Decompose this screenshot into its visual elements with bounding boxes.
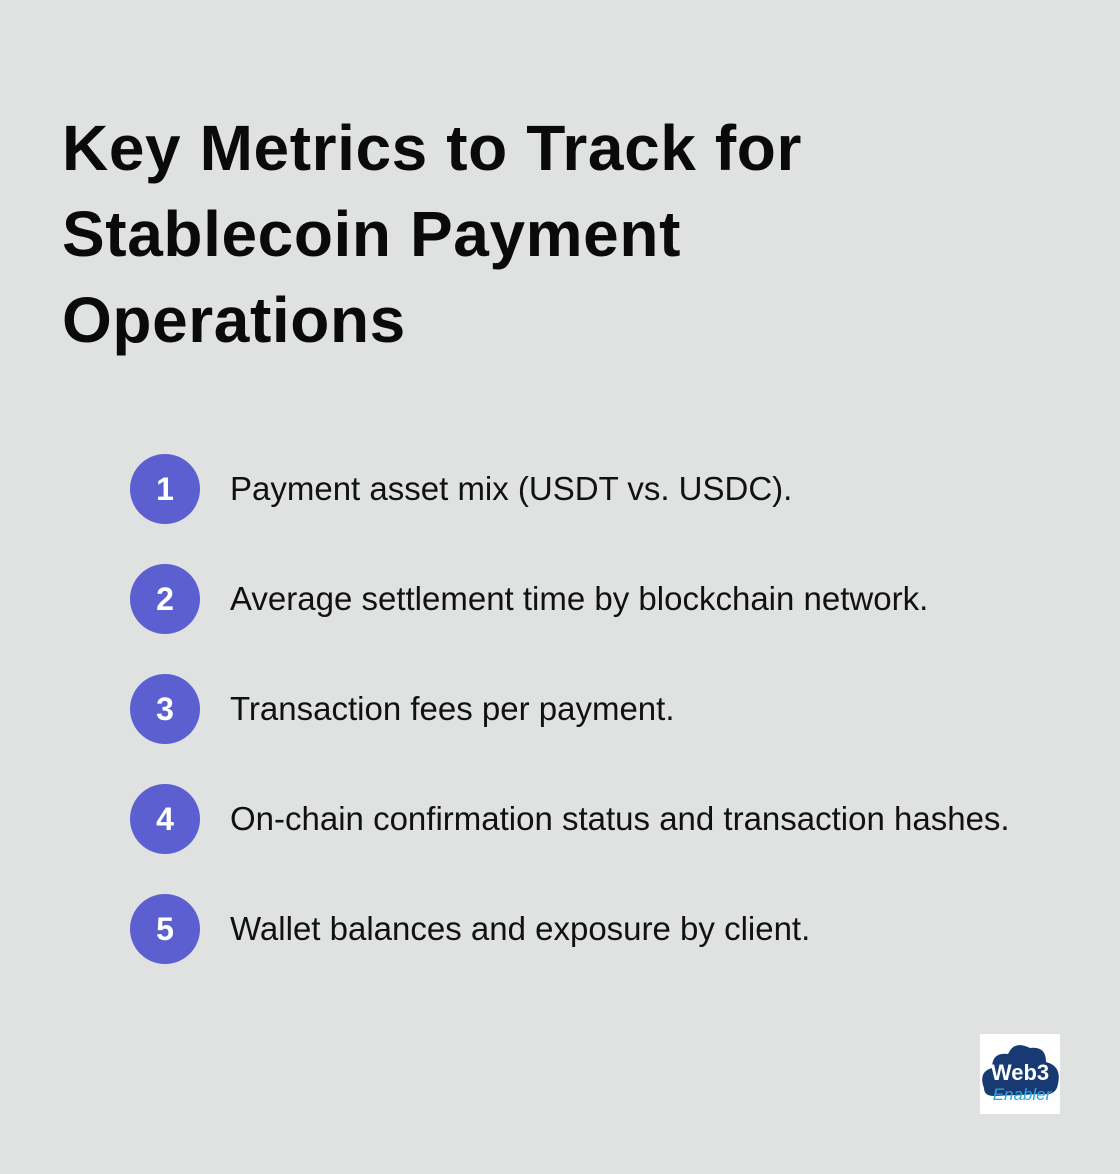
item 5: 5 <box>156 911 174 947</box>
logo: Enabler <box>993 1085 1053 1104</box>
item 1: 1 <box>156 471 174 507</box>
item 2 <box>130 564 928 634</box>
logo <box>980 1034 1060 1114</box>
item 1: Payment asset mix (USDT vs. USDC). <box>230 470 792 507</box>
item 4 <box>130 784 1010 854</box>
title: Key Metrics to Track for <box>62 112 802 184</box>
item 3: 3 <box>156 691 174 727</box>
item 3: Transaction fees per payment. <box>230 690 675 727</box>
item 5 <box>130 894 810 964</box>
item 2: 2 <box>156 581 174 617</box>
logo: Web3 <box>991 1060 1049 1085</box>
item 4: 4 <box>156 801 174 837</box>
item 5: Wallet balances and exposure by client. <box>230 910 810 947</box>
title <box>62 112 802 356</box>
item 4: On-chain confirmation status and transaction hashes. <box>230 800 1010 837</box>
item 2: Average settlement time by blockchain network. <box>230 580 928 617</box>
item 1 <box>130 454 792 524</box>
title: Stablecoin Payment <box>62 198 681 270</box>
title: Operations <box>62 284 406 356</box>
item 3 <box>130 674 675 744</box>
